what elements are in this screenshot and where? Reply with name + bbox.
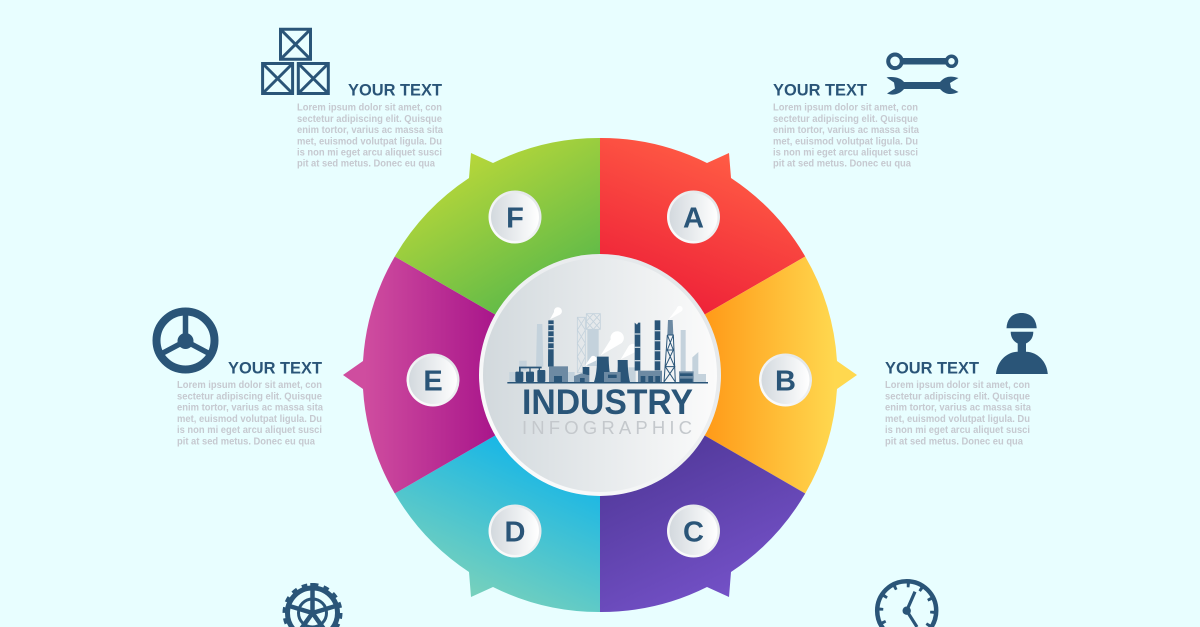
segment A: [600, 138, 805, 375]
subtitle: INFOGRAPHIC: INFOGRAPHIC: [522, 417, 696, 438]
chimney stripes: [548, 324, 660, 361]
text block F: met, euismod volutpat ligula. Du: [297, 136, 442, 147]
segment C: [600, 375, 805, 612]
text block B: is non mi eget arcu aliquet susci: [885, 425, 1030, 436]
letter badge B: B: [775, 365, 796, 397]
text block B: YOUR TEXT: [885, 358, 980, 377]
lattice towers: [577, 314, 600, 373]
icon: steering wheel: [156, 312, 214, 370]
mid-tone factory buildings: [549, 320, 694, 382]
text block A: enim tortor, varius ac massa sita: [773, 125, 919, 136]
letter badge F: F: [506, 202, 524, 234]
text block E: Lorem ipsum dolor sit amet, con: [177, 380, 322, 391]
text block A: pit at sed metus. Donec eu qua: [773, 159, 911, 170]
text block E: YOUR TEXT: [228, 358, 323, 377]
segment B: [600, 256, 857, 494]
text block B: sectetur adipiscing elit. Quisque: [885, 391, 1030, 402]
segment F: [395, 138, 600, 375]
letter badge D: D: [505, 516, 525, 548]
letter badge A: A: [683, 202, 704, 234]
title: INDUSTRY: INDUSTRY: [522, 383, 693, 422]
letter badge B: [759, 354, 812, 406]
text block E: sectetur adipiscing elit. Quisque: [177, 391, 322, 402]
segment D: [395, 375, 600, 612]
letter badge D: [488, 504, 542, 558]
text block F: is non mi eget arcu aliquet susci: [297, 148, 442, 158]
wheel of six segments: [343, 138, 857, 612]
letter badge C: [667, 504, 720, 558]
central hub circle: [479, 254, 721, 496]
letter badge A: [667, 190, 720, 244]
icon: clock gauge: [877, 581, 936, 627]
text block E: met, euismod volutpat ligula. Du: [177, 414, 322, 425]
text block E: enim tortor, varius ac massa sita: [177, 403, 323, 414]
smoke plumes: [550, 306, 683, 366]
text block F: YOUR TEXT: [348, 81, 443, 100]
text block A: is non mi eget arcu aliquet susci: [773, 148, 918, 158]
text block E: [177, 358, 323, 448]
icon: gear wheel: [285, 583, 340, 627]
text block F: sectetur adipiscing elit. Quisque: [297, 114, 442, 125]
letter badge E: [406, 354, 460, 406]
letter badge E: E: [423, 365, 443, 397]
text block E: is non mi eget arcu aliquet susci: [177, 425, 322, 436]
text block F: enim tortor, varius ac massa sita: [297, 125, 443, 136]
dark chimneys and cooling towers: [507, 320, 708, 383]
factory skyline illustration: [507, 306, 708, 383]
text block A: sectetur adipiscing elit. Quisque: [773, 114, 918, 125]
letter badge C: C: [683, 516, 704, 548]
text block B: Lorem ipsum dolor sit amet, con: [885, 380, 1030, 391]
text block A: Lorem ipsum dolor sit amet, con: [773, 103, 918, 114]
text block A: [773, 81, 919, 170]
text block B: pit at sed metus. Donec eu qua: [885, 436, 1023, 448]
letter badge F: [488, 190, 542, 244]
icon: wrenches: [886, 54, 958, 95]
dark building details: [554, 373, 693, 382]
pale background buildings: [509, 324, 706, 382]
text block B: enim tortor, varius ac massa sita: [885, 403, 1031, 414]
icon: worker with hard hat: [996, 313, 1048, 374]
text block F: [297, 81, 443, 170]
text block A: met, euismod volutpat ligula. Du: [773, 136, 918, 147]
text block B: met, euismod volutpat ligula. Du: [885, 414, 1030, 425]
text block E: pit at sed metus. Donec eu qua: [177, 436, 315, 448]
text block F: pit at sed metus. Donec eu qua: [297, 159, 435, 170]
text block B: [885, 358, 1031, 448]
icon: stacked crates: [263, 29, 328, 93]
text block A: YOUR TEXT: [773, 81, 868, 100]
lattice pylon: [664, 335, 675, 382]
segment E: [343, 256, 600, 494]
text block F: Lorem ipsum dolor sit amet, con: [297, 103, 442, 114]
